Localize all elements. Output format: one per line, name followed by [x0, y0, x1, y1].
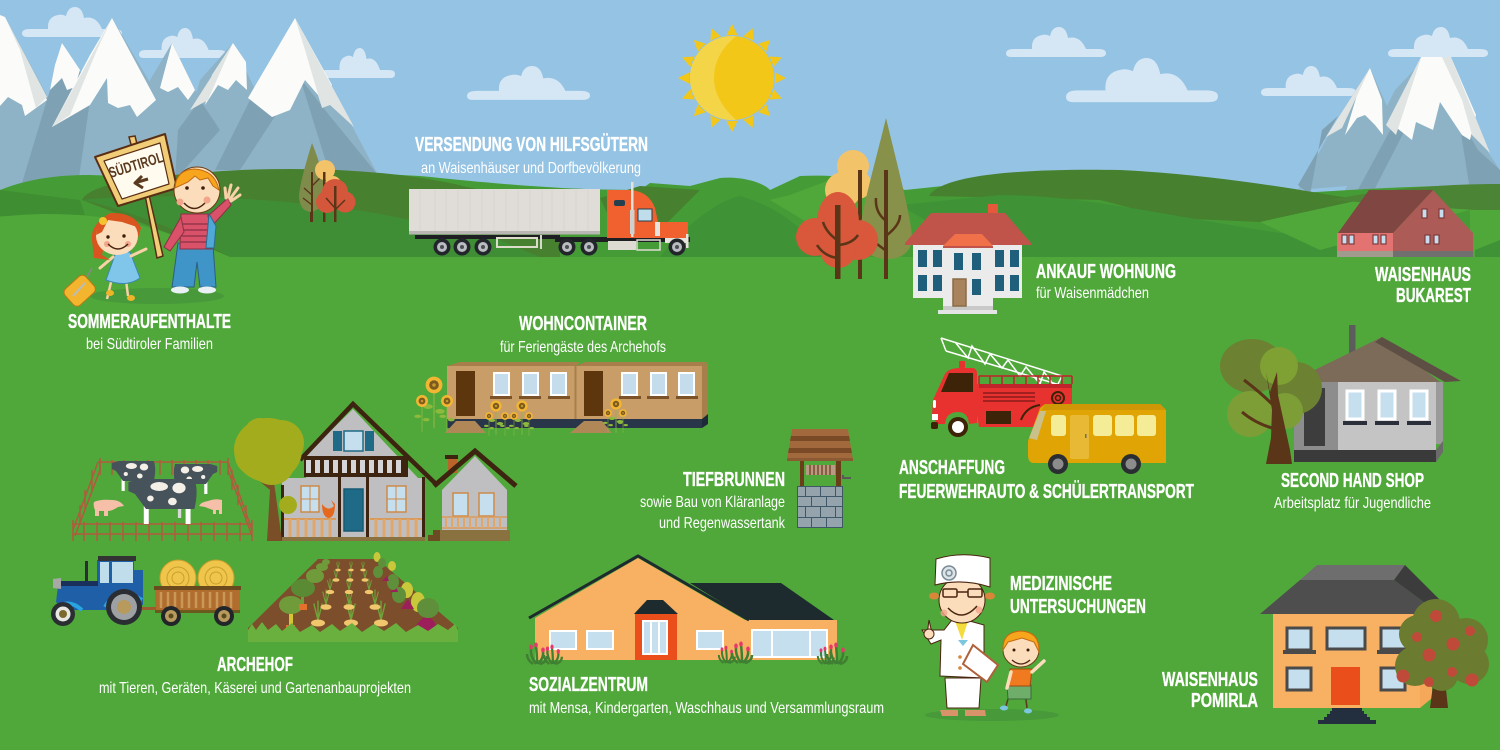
white house: [905, 204, 1031, 314]
animal pen: [72, 458, 252, 541]
heading: Versendung von Hilfsgütern: [415, 133, 648, 177]
doctor and child: [922, 555, 1059, 721]
pigs: [94, 499, 222, 516]
heading: Versendung von Hilfsgütern: an Waisenhäuser und Dorfbevölkerung: [421, 160, 641, 177]
heading: Sozialzentrum: [529, 674, 884, 717]
heading: Anschaffung: [899, 457, 1194, 503]
heading: Medizinische Untersuchungen: MEDIZINISCHE: [1010, 573, 1112, 595]
farm house: [234, 404, 516, 541]
hills: [0, 169, 1500, 750]
doctor: [922, 555, 998, 716]
crops: [311, 561, 388, 626]
clouds left: [22, 7, 590, 100]
tulips: [527, 642, 847, 664]
cloud on right peak: [1388, 27, 1488, 57]
heading: Tiefbrunnen: TIEFBRUNNEN: [683, 469, 785, 491]
heading: Sommeraufenthalte: SOMMERAUFENTHALTE: [68, 311, 231, 333]
child: [1000, 631, 1044, 714]
cab: [555, 182, 690, 250]
heading: Anschaffung: ANSCHAFFUNG: [899, 457, 1005, 479]
grass strip: [248, 622, 458, 642]
heading: Second Hand Shop: Arbeitsplatz für Jugendliche: [1274, 495, 1431, 512]
heading: Waisenhaus Pomirla: [1162, 669, 1258, 712]
heading: Anschaffung: FEUERWEHRAUTO & SCHÜLERTRANSPORT: [899, 480, 1194, 503]
large tree group: [796, 118, 912, 279]
heading: Ankauf Wohnung: ANKAUF WOHNUNG: [1036, 261, 1176, 283]
heading: Tiefbrunnen: [640, 469, 786, 532]
hay bales: [160, 560, 234, 596]
wheels: [434, 238, 686, 256]
social centre building: [527, 556, 847, 664]
small annex house: [428, 451, 516, 541]
red house Bukarest: [1337, 190, 1473, 257]
sign board: [95, 134, 177, 206]
heading: Waisenhaus Bukarest: [1375, 264, 1471, 307]
heading: Waisenhaus Pomirla: POMIRLA: [1191, 690, 1258, 712]
truck: [409, 182, 690, 256]
vegetable field: [248, 552, 458, 642]
sign post: [129, 136, 163, 258]
background sky: [0, 0, 1500, 300]
school bus: [1028, 404, 1166, 474]
sign board: SÜDTIROL: [107, 149, 165, 182]
heading: Medizinische Untersuchungen: UNTERSUCHUNGEN: [1010, 596, 1146, 618]
heading: Versendung von Hilfsgütern: VERSENDUNG VON HILFSGÜTERN: [415, 133, 648, 156]
trailer: [409, 189, 600, 249]
fire truck: [931, 338, 1072, 437]
heading: Tiefbrunnen: und Regenwassertank: [659, 515, 786, 532]
apple tree: [1395, 599, 1489, 708]
trailer: [142, 586, 241, 626]
small tree group: [299, 143, 356, 222]
heading: Wohncontainer: WOHNCONTAINER: [519, 313, 647, 335]
heading: Sommeraufenthalte: [68, 311, 231, 353]
kids with sign illustration: [62, 134, 240, 308]
heading: Wohncontainer: [500, 313, 666, 356]
Pomirla orphanage house: [1260, 565, 1489, 724]
heading: Ankauf Wohnung: [1036, 261, 1176, 302]
tractor with hay trailer: [51, 556, 241, 626]
heading: Second Hand Shop: [1274, 470, 1431, 512]
heading: Archehof: ARCHEHOF: [217, 654, 293, 676]
second hand shop: [1220, 325, 1461, 464]
heading: Sozialzentrum: mit Mensa, Kindergarten, Waschhaus und Versammlungsraum: [529, 700, 884, 717]
clouds right: [1006, 27, 1356, 102]
girl: [62, 213, 146, 308]
heading: Second Hand Shop: SECOND HAND SHOP: [1281, 470, 1424, 492]
heading: Ankauf Wohnung: für Waisenmädchen: [1036, 285, 1149, 302]
tractor body: [51, 556, 143, 626]
well: [787, 429, 853, 528]
heading: Waisenhaus Pomirla: WAISENHAUS: [1162, 669, 1258, 691]
mountains right: [1298, 50, 1500, 200]
fence: [72, 458, 252, 541]
mountains left: [0, 15, 378, 190]
farm tree: [234, 418, 304, 541]
heading: Archehof: [99, 654, 411, 697]
heading: Tiefbrunnen: sowie Bau von Kläranlage: [640, 494, 785, 511]
ground shadow: [90, 288, 224, 304]
sunflowers: [414, 377, 628, 436]
boy: [164, 167, 240, 294]
heading: Wohncontainer: für Feriengäste des Archehofs: [500, 339, 666, 356]
containers: [414, 362, 708, 436]
ladder: [941, 338, 1070, 388]
rooster: [322, 500, 335, 518]
shop tree: [1220, 339, 1322, 464]
heading: Medizinische Untersuchungen: [1010, 573, 1146, 618]
heading: Archehof: mit Tieren, Geräten, Käserei und Gartenanbauprojekten: [99, 680, 411, 697]
entrance steps: [1318, 708, 1376, 724]
heading: Sommeraufenthalte: bei Südtiroler Familien: [86, 336, 213, 353]
heading: Sozialzentrum: SOZIALZENTRUM: [529, 674, 648, 696]
sun: [678, 24, 786, 132]
